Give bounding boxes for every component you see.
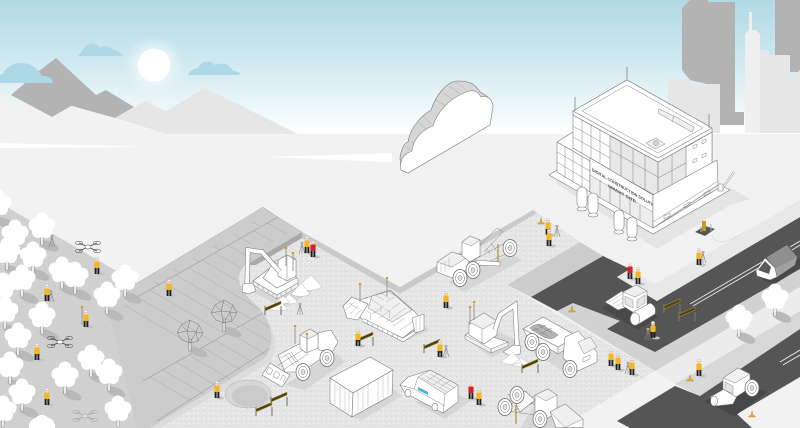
asphalt road upper	[531, 217, 800, 352]
roller shade patch lower	[705, 380, 767, 416]
excavator 2	[465, 301, 532, 367]
roller 1	[605, 285, 655, 325]
survey tripods	[48, 225, 706, 374]
lot shadow in front of building	[555, 178, 750, 249]
wall shaded strip near excavator	[246, 232, 302, 265]
roller shade patch upper	[602, 297, 658, 330]
terrace outline trees	[177, 300, 243, 359]
building: upper right facade	[658, 132, 712, 195]
skyline: dark towers	[682, 0, 800, 125]
sign lettering: DIGITAL CONSTRUCTION SOLUTIONS	[592, 167, 660, 211]
sand site ground	[137, 210, 655, 428]
sun	[124, 35, 184, 95]
entrance pillars	[577, 187, 637, 241]
grader top	[437, 228, 522, 292]
mountains: foreground range	[0, 93, 166, 134]
dump truck	[523, 317, 600, 378]
sky background	[0, 0, 800, 134]
3D cloud icon	[400, 81, 493, 173]
bulldozer	[343, 277, 430, 342]
barriers	[256, 299, 695, 416]
office building	[549, 67, 734, 241]
loader	[262, 325, 345, 390]
building: left wing	[557, 132, 600, 192]
van	[400, 370, 472, 419]
van wheels	[405, 389, 438, 411]
van blue label	[418, 387, 428, 395]
cloud middle	[78, 44, 123, 56]
mountains: dark range	[11, 58, 134, 118]
road markings	[690, 241, 800, 365]
flagpole / lamp right	[718, 172, 734, 191]
roadside trees	[726, 284, 793, 346]
grey strip before asphalt	[507, 242, 603, 297]
platform strip	[675, 311, 800, 396]
building: slab	[549, 170, 730, 234]
ground plane	[0, 134, 800, 428]
forest trees	[0, 190, 143, 428]
tree sidewalk	[655, 287, 800, 384]
hut sensor station	[695, 221, 745, 242]
cloud left	[0, 63, 53, 83]
skyline	[668, 0, 800, 133]
building: upper front facade	[573, 115, 658, 197]
survey poles	[81, 306, 83, 325]
sign lettering: SMART SITE	[608, 183, 636, 204]
container	[330, 357, 402, 420]
forest ground	[0, 203, 137, 428]
grader bottom	[498, 386, 583, 428]
sidewalk upper	[617, 200, 800, 301]
terrace lines	[124, 207, 302, 421]
terrace border curve	[137, 265, 275, 428]
roof units	[658, 109, 694, 132]
building: podium front	[590, 158, 660, 228]
road truck	[756, 245, 800, 284]
ground highlights	[0, 143, 392, 162]
excavator 1	[242, 247, 312, 308]
cloud right	[188, 62, 241, 75]
sand piles	[268, 275, 322, 311]
skyline: spire tower	[745, 12, 760, 133]
antennas	[575, 67, 709, 128]
mountains: mid range	[115, 88, 298, 134]
pit	[225, 380, 271, 408]
drones	[48, 241, 100, 422]
traffic cones	[538, 218, 756, 417]
terraced slope	[108, 207, 302, 428]
roof hatch	[646, 138, 665, 149]
workers	[34, 218, 706, 406]
retaining wall	[302, 210, 537, 294]
curb strip	[557, 269, 800, 371]
building: podium right	[653, 160, 718, 228]
asphalt road lower	[617, 329, 800, 428]
building: roof	[573, 67, 712, 162]
roller 2	[710, 368, 759, 406]
skyline: light blocks	[668, 50, 800, 133]
